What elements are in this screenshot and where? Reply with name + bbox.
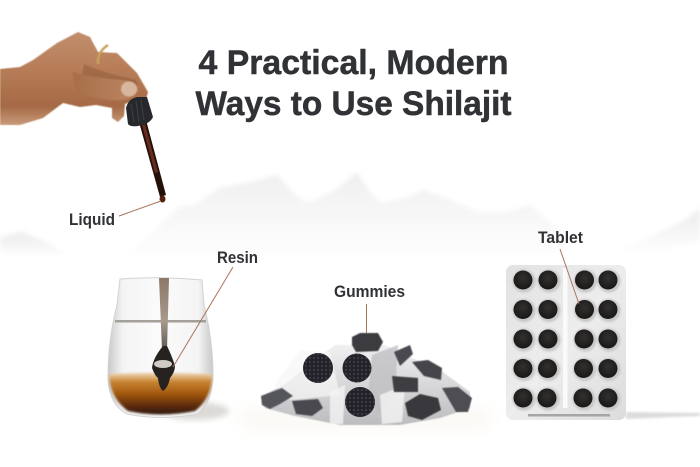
label: Gummies: [334, 283, 405, 333]
thumb nail: [121, 82, 137, 96]
dark gummy shoulder: [394, 345, 413, 366]
water line: [115, 320, 206, 322]
tablets: [514, 270, 618, 408]
label: Resin: Resin: [217, 249, 258, 267]
berry gummy 1: [303, 353, 333, 383]
hand: [0, 32, 148, 125]
ring: [98, 45, 108, 64]
spoon handle: [159, 278, 169, 350]
dark gummy upper right: [412, 360, 442, 380]
dark gummy left: [261, 388, 293, 409]
berry gummy 3: [345, 387, 375, 417]
label: Tablet: Tablet: [538, 229, 583, 247]
berry gummy 2: [342, 354, 372, 382]
dark gummy lower right: [405, 394, 441, 420]
wrappers: [262, 345, 470, 425]
dropper glass tube: [139, 120, 166, 197]
tablet blister pack: [506, 265, 700, 420]
pack body: [506, 265, 626, 420]
center groove: [563, 268, 568, 408]
finger shadow: [82, 64, 138, 85]
label: Liquid: Liquid: [69, 210, 115, 229]
label: Liquid: [69, 201, 161, 229]
glass shadow: [161, 402, 229, 420]
label: Gummies: Gummies: [334, 283, 405, 301]
glass of resin water: [108, 278, 229, 420]
title: Ways to Use Shilajit: [196, 85, 512, 123]
imprint: [528, 414, 610, 416]
dark gummy mid right: [392, 376, 418, 392]
glass body: [108, 278, 213, 418]
label: Resin: [173, 249, 258, 367]
floor shade: [240, 412, 490, 426]
label: Tablet: [538, 229, 583, 304]
dark gummy right: [442, 387, 472, 412]
tablet wells: [512, 270, 620, 410]
dropper: liquid: [139, 120, 166, 202]
title: 4 Practical, Modern: [198, 44, 508, 82]
title: [196, 44, 512, 123]
top gummy: [352, 333, 383, 352]
dropper tip: [160, 196, 166, 202]
resin liquid: [109, 372, 212, 414]
mountain silhouette: [0, 172, 700, 262]
spoon bowl: [152, 346, 175, 391]
dark gummy lower left: [292, 399, 323, 416]
pack shadow: [626, 412, 700, 419]
gummies pile: [261, 333, 472, 425]
thumb: [72, 72, 138, 100]
dropper cap: [126, 97, 153, 126]
